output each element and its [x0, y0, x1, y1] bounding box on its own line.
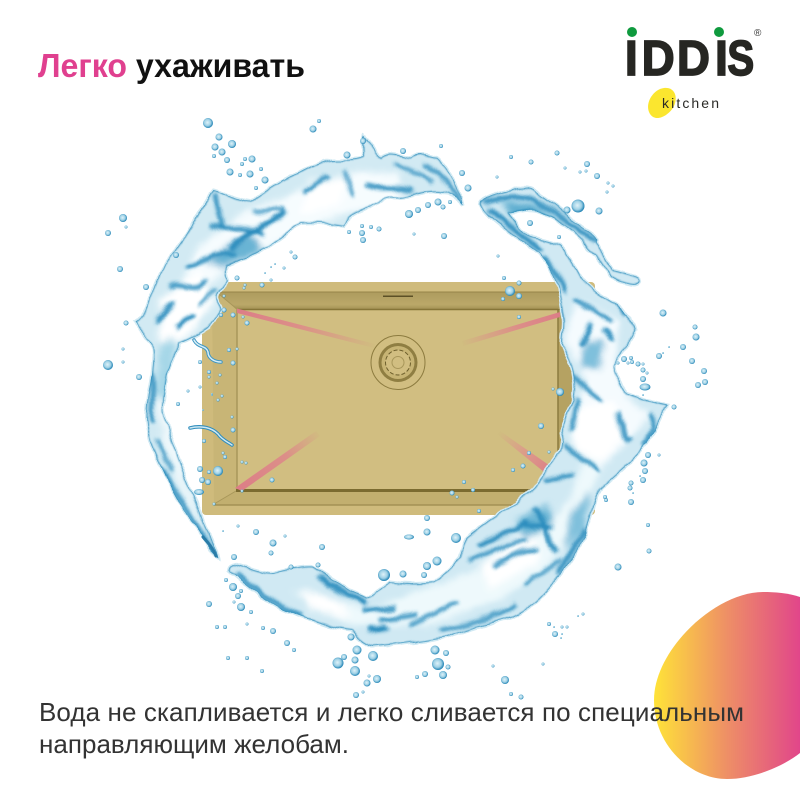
title: Легко ухаживать	[38, 47, 305, 84]
drain	[371, 336, 425, 390]
sink rim	[212, 292, 572, 505]
sink bottom band	[214, 490, 560, 504]
splash: right and lower arc	[228, 187, 668, 647]
overflow slot	[383, 296, 413, 297]
pink groove top right	[462, 312, 560, 346]
registered mark: ®	[754, 28, 762, 39]
sink left band	[214, 295, 237, 504]
description line 1: Вода не скапливается и легко сливается по специальным	[39, 697, 744, 727]
pink groove bottom right	[497, 431, 556, 476]
logo wordmark: S	[727, 31, 754, 86]
description text	[39, 697, 744, 759]
sink basin	[237, 310, 558, 490]
splash: small tendrils	[190, 340, 232, 556]
pink groove top left	[237, 308, 375, 348]
sink	[202, 282, 595, 515]
logo	[625, 27, 762, 118]
droplets	[103, 118, 708, 700]
description line 2: направляющим желобам.	[39, 729, 349, 759]
gradient blob	[654, 592, 800, 779]
pink groove bottom left	[235, 431, 320, 491]
sink plate	[202, 282, 595, 515]
kitchen label: kitchen	[662, 95, 719, 111]
sink top band	[219, 292, 564, 310]
logo dots	[627, 27, 637, 37]
splash: upper left arc	[135, 136, 462, 558]
logo wordmark: IDDI	[625, 32, 728, 86]
sink right band	[558, 308, 572, 498]
yellow spot	[648, 88, 676, 118]
water splash	[103, 118, 708, 700]
